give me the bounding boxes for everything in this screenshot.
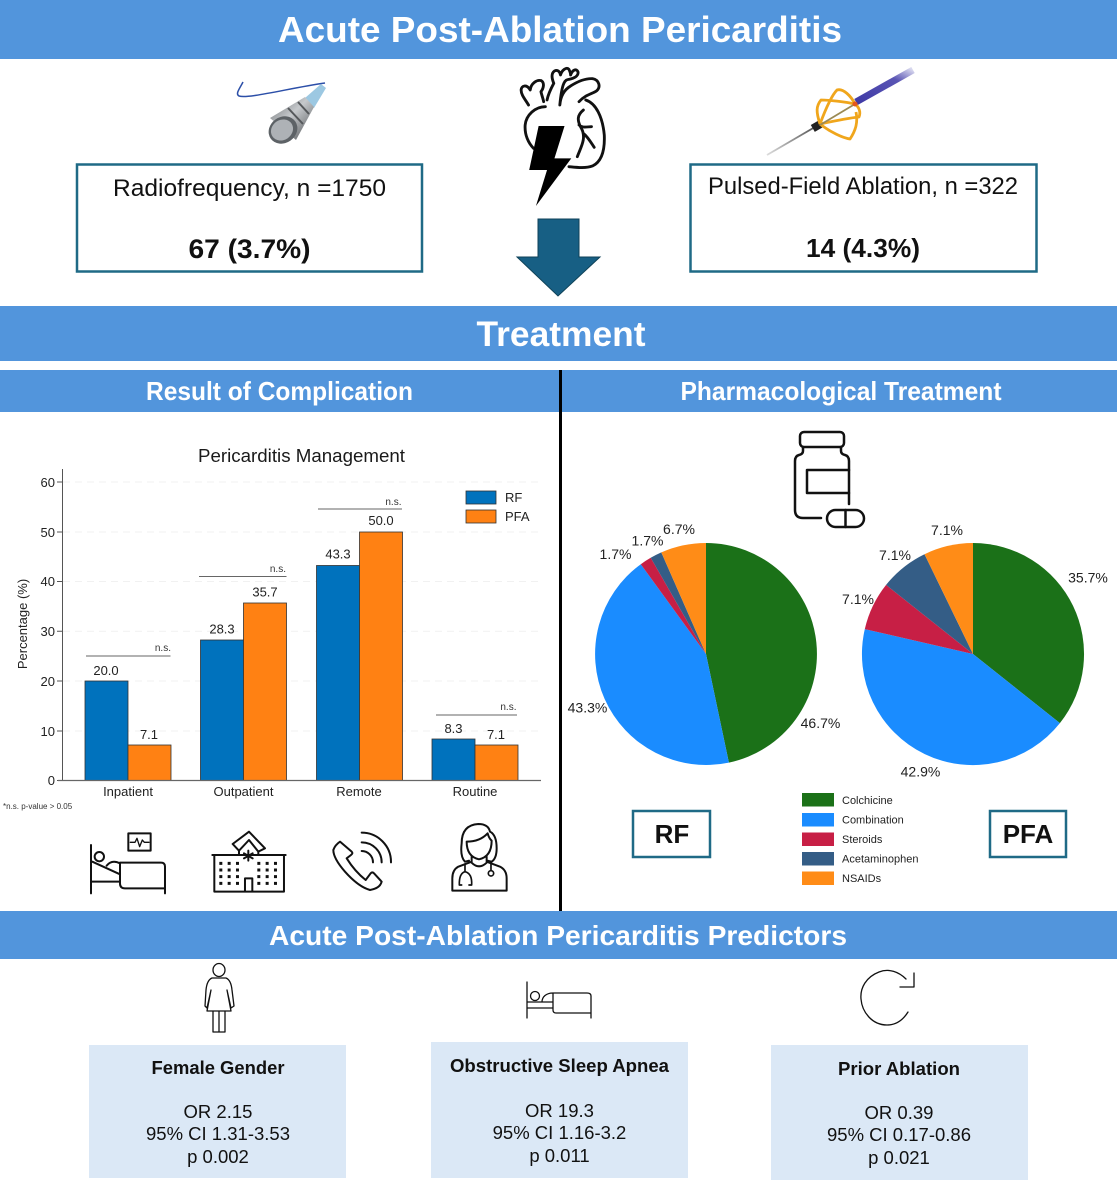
icon: circular arrow (861, 970, 914, 1025)
y axis: 60 (41, 475, 55, 490)
predictor card: obstructive sleep apnea (431, 1042, 688, 1178)
RF pie labels (568, 521, 840, 731)
significance brackets: n.s. (155, 643, 171, 654)
icon: outpatient hospital (212, 832, 286, 892)
chart legend (466, 490, 530, 524)
category labels: Outpatient (214, 784, 274, 799)
pie chart: RF (568, 521, 840, 765)
arrow down (517, 219, 600, 296)
predictors banner (0, 911, 1117, 959)
title banner (0, 0, 1117, 59)
predictor card: female gender (89, 1045, 346, 1178)
pie legend (802, 793, 918, 885)
PFA pie labels (842, 522, 1108, 780)
predictor card: obstructive sleep apnea: Obstructive Sleep Apnea (450, 1056, 670, 1076)
bars: RF and PFA (85, 532, 518, 780)
PFA pie labels: 42.9% (901, 764, 940, 780)
RF pie labels: 6.7% (663, 521, 695, 537)
icon: remote phone (333, 833, 391, 890)
predictors banner: Acute Post-Ablation Pericarditis Predictors (269, 920, 847, 951)
treatment banner (0, 306, 1117, 361)
icon: woman (205, 964, 234, 1032)
predictor card: prior ablation: Prior Ablation (838, 1059, 960, 1079)
RF value: 67 (3.7%) (188, 234, 310, 264)
pie legend: Combination (842, 814, 904, 826)
significance brackets: n.s. (385, 497, 402, 508)
bar value labels: 7.1 (487, 727, 505, 742)
footnote: *n.s. p-value > 0.05 (3, 802, 73, 811)
pie legend: Steroids (842, 834, 883, 846)
RF label: Radiofrequency, n =1750 (113, 175, 386, 202)
bar value labels: 43.3 (325, 546, 351, 562)
y axis (15, 469, 62, 788)
y axis: 20 (41, 674, 55, 689)
pie legend: Colchicine (842, 795, 893, 807)
bar value labels (93, 513, 505, 742)
y axis: 10 (41, 724, 55, 739)
PFA pie labels: 35.7% (1068, 570, 1108, 586)
y axis: 0 (48, 773, 55, 788)
RF pie tag (633, 811, 710, 857)
PFA pie labels: 7.1% (879, 547, 911, 563)
chart title: Pericarditis Management (198, 445, 405, 466)
RF pie labels: 1.7% (600, 546, 631, 562)
RF pie tag: RF (655, 819, 689, 849)
bar value labels: 50.0 (368, 513, 394, 528)
panel heading: result of complication: Result of Complication (146, 376, 413, 406)
bar value labels: 20.0 (93, 663, 119, 678)
predictor card: prior ablation (771, 1045, 1028, 1180)
y axis: 30 (41, 624, 55, 639)
category labels (103, 784, 497, 799)
RF pie labels: 1.7% (632, 532, 663, 548)
predictor card: female gender: Female Gender (152, 1058, 284, 1078)
pie chart: PFA (842, 522, 1108, 780)
icon: pulsed-field ablation catheter (767, 70, 913, 155)
panel heading: result of complication (0, 370, 559, 412)
bar value labels: 28.3 (209, 622, 235, 636)
title banner: Acute Post-Ablation Pericarditis (278, 9, 842, 50)
category labels: Routine (453, 784, 497, 799)
RF pie labels: 46.7% (801, 715, 840, 731)
icon: medicine bottle and pill (795, 432, 864, 527)
RF pie labels: 43.3% (568, 700, 607, 716)
bar value labels: 35.7 (252, 584, 278, 600)
icon: radiofrequency catheter (238, 82, 326, 149)
predictor card: female gender: OR 2.15 (184, 1101, 252, 1122)
PFA label: Pulsed-Field Ablation, n =322 (708, 173, 1018, 200)
predictor card: prior ablation: 95% CI 0.17-0.86 (827, 1124, 971, 1145)
predictor card: obstructive sleep apnea: p 0.011 (529, 1145, 590, 1166)
PFA pie labels: 7.1% (931, 522, 963, 538)
predictor card: prior ablation: OR 0.39 (865, 1102, 933, 1123)
significance brackets: n.s. (500, 702, 516, 713)
PFA pie tag (990, 811, 1066, 857)
PFA result box (690, 164, 1036, 272)
pie legend: Acetaminophen (842, 854, 918, 866)
category labels: Inpatient (103, 784, 153, 799)
panel heading: pharmacological treatment: Pharmacological Treatment (680, 376, 1002, 406)
predictor card: prior ablation: p 0.021 (868, 1147, 930, 1168)
icon: heart with lightning bolt (521, 68, 604, 206)
significance brackets (86, 497, 517, 715)
bar value labels: 7.1 (140, 727, 158, 742)
y axis: Percentage (%) (15, 579, 30, 669)
chart legend: RF (505, 490, 522, 505)
treatment banner: Treatment (476, 315, 646, 354)
predictor card: female gender: p 0.002 (187, 1146, 249, 1167)
PFA value: 14 (4.3%) (806, 233, 920, 263)
icon: inpatient bed (91, 833, 165, 893)
bar value labels: 8.3 (444, 721, 463, 736)
icon: sleep apnea bed (527, 982, 591, 1018)
significance brackets: n.s. (270, 564, 286, 575)
icon: routine doctor (452, 824, 507, 891)
bar chart: pericarditis management (15, 445, 541, 799)
predictor card: female gender: 95% CI 1.31-3.53 (146, 1123, 290, 1144)
predictor card: obstructive sleep apnea: 95% CI 1.16-3.2 (493, 1122, 626, 1143)
y axis: 40 (41, 574, 55, 589)
PFA pie labels: 7.1% (842, 591, 874, 607)
pie legend: NSAIDs (842, 873, 882, 885)
y axis: 50 (41, 525, 55, 540)
panel heading: pharmacological treatment (562, 370, 1117, 412)
category labels: Remote (336, 784, 382, 799)
predictor card: obstructive sleep apnea: OR 19.3 (525, 1100, 594, 1121)
chart legend: PFA (505, 509, 530, 524)
PFA pie tag: PFA (1003, 819, 1054, 849)
RF result box (77, 164, 422, 272)
